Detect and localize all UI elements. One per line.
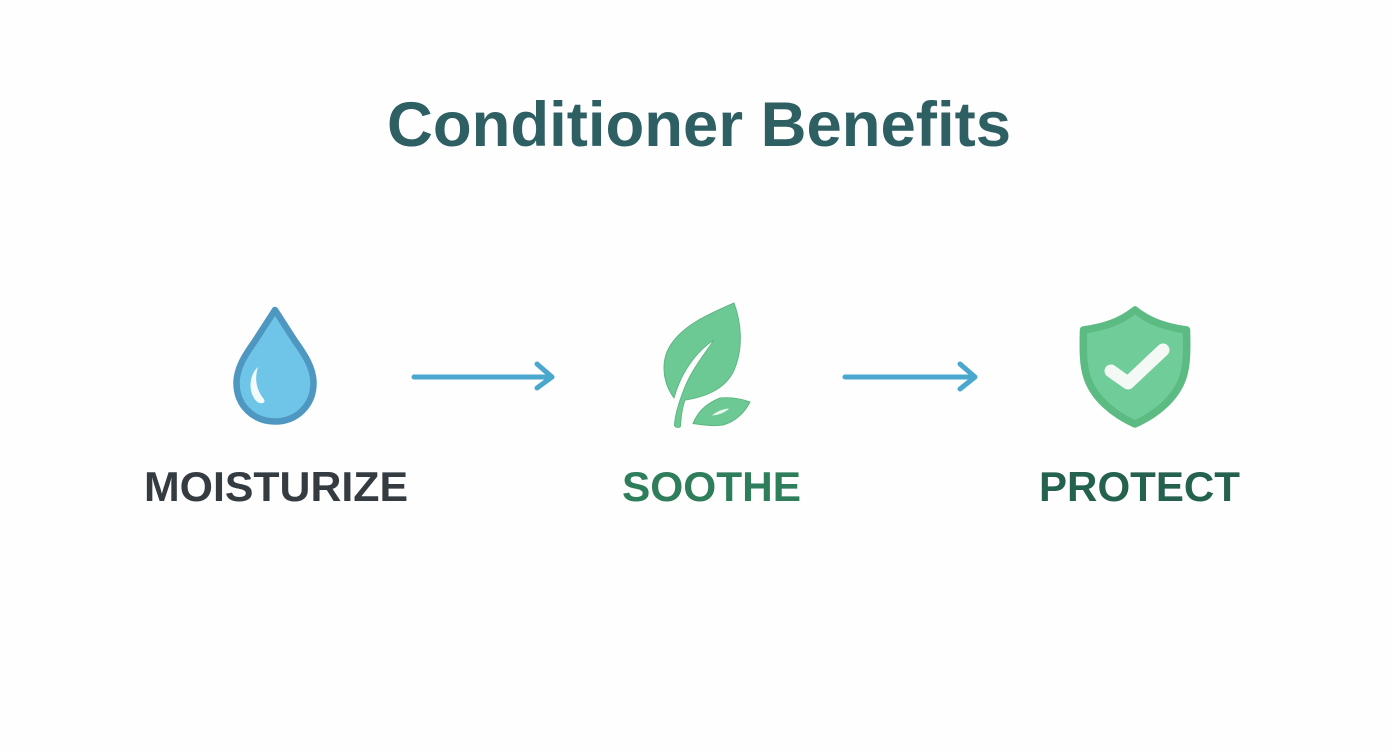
label: protect: PROTECT <box>1039 463 1240 510</box>
label: moisturize: MOISTURIZE <box>144 463 408 510</box>
arrow: soothe to protect <box>845 364 975 389</box>
icon: shield with check <box>1083 310 1187 424</box>
arrow: moisturize to soothe <box>414 364 552 388</box>
label: soothe: SOOTHE <box>622 463 801 510</box>
title: Conditioner Benefits <box>387 90 1011 160</box>
icon: water drop <box>236 310 314 422</box>
icon: leaf <box>664 303 750 427</box>
